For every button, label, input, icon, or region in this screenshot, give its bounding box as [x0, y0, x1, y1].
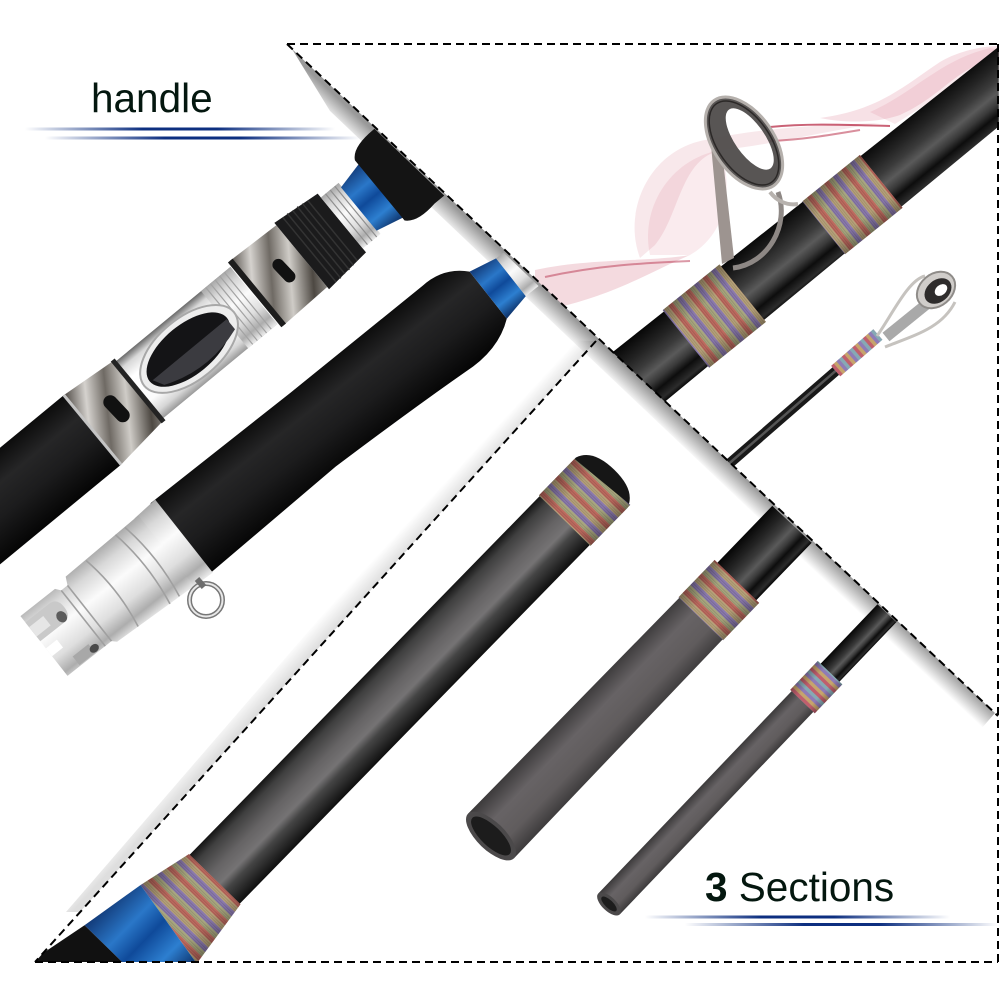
- thread wrap upper: [802, 155, 903, 254]
- top rod blank: [614, 48, 999, 402]
- section three, thin blank: [597, 604, 896, 916]
- heading: 3 Sections: [645, 864, 998, 926]
- panel: guides and top rod: [535, 42, 1000, 475]
- icon: snap ring on butt cap: [190, 579, 222, 616]
- tip section blank: [727, 329, 882, 466]
- open blank end: [597, 892, 620, 916]
- icon: large line guide: [704, 96, 798, 270]
- lower thread wrap: [140, 854, 240, 961]
- section one, large blank: [37, 455, 630, 962]
- open blank end: [466, 812, 516, 860]
- lower handle grip with butt cap: [20, 252, 538, 676]
- panel: handle: [0, 128, 538, 676]
- panel: three rod sections: [37, 455, 896, 962]
- icon: tip top guide: [876, 270, 956, 348]
- section two, medium blank: [466, 506, 812, 860]
- black foam below check: [37, 925, 122, 962]
- thread wrap lower: [663, 264, 766, 368]
- red smoke ribbons: [535, 46, 1000, 307]
- heading: 3 Sections: 3 Sections: [705, 864, 894, 910]
- upper handle assembly: [0, 128, 444, 564]
- heading: handle: handle: [91, 75, 213, 121]
- heading: handle: [25, 75, 360, 140]
- tip thread wrap: [831, 329, 883, 376]
- blue winding check: [84, 885, 195, 962]
